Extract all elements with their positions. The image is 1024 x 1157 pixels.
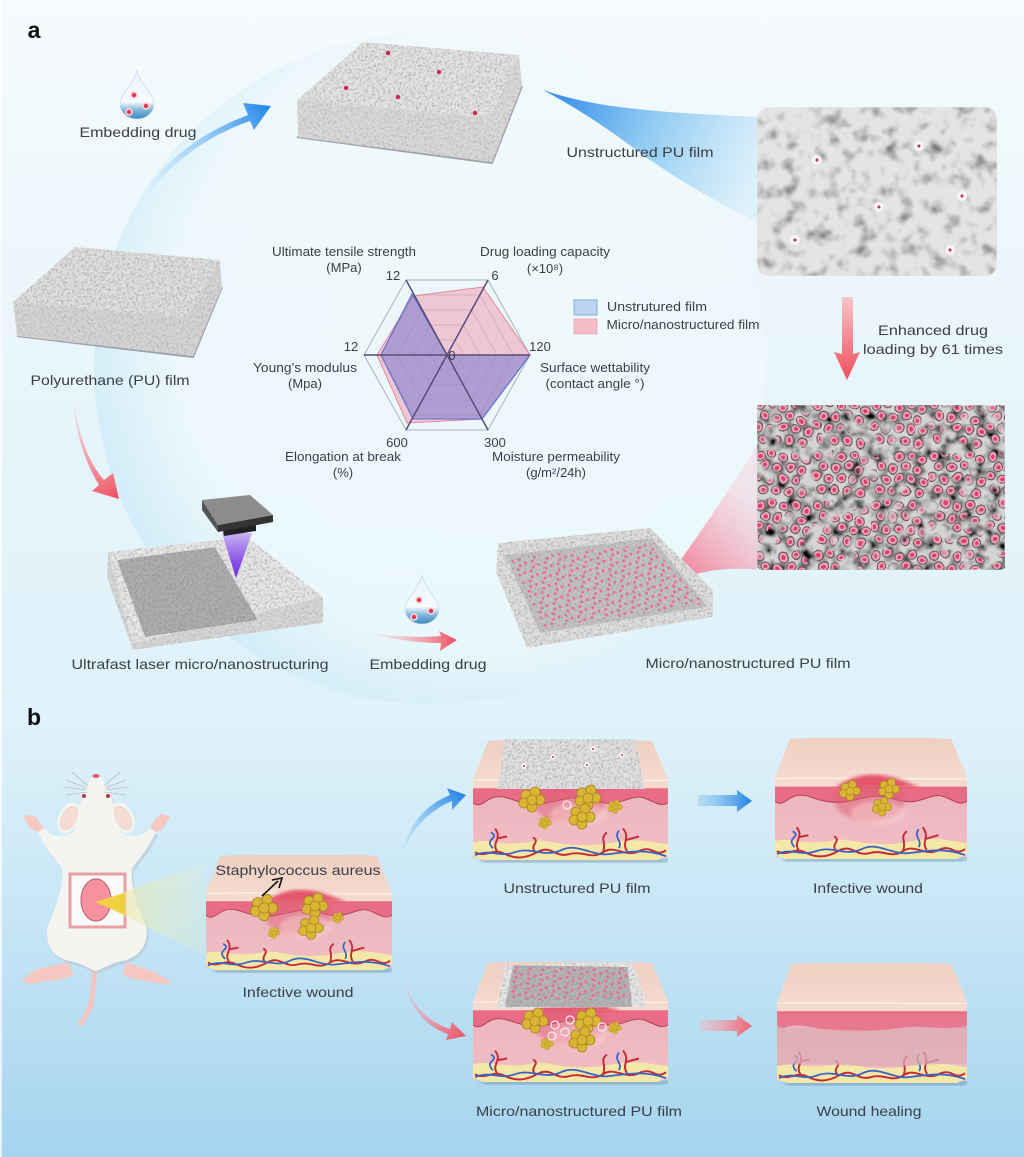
- beam core: [95, 893, 125, 915]
- arrow: embedding drug blue: [148, 103, 271, 190]
- laser head and beam: [202, 495, 273, 578]
- panel: a: [13, 17, 1005, 672]
- text: polyurethane film: Polyurethane (PU) film: [30, 372, 190, 388]
- text: infective wound result: Infective wound: [813, 880, 923, 896]
- radar chart: Surface wettability: [540, 360, 651, 375]
- panel: b: [21, 704, 978, 1119]
- wound block with unstructured film: [473, 739, 679, 863]
- arrow: to laser: [74, 395, 119, 499]
- text: wound healing: Wound healing: [816, 1103, 922, 1119]
- arrow: enhanced loading: [834, 297, 860, 380]
- micro/nanostructured film block: [496, 528, 713, 648]
- radar chart: 12: [344, 339, 358, 354]
- healed skin block: [777, 963, 978, 1086]
- arrow: pink straight: [700, 1015, 752, 1037]
- radar chart: 120: [529, 339, 551, 354]
- text: micro film: Micro/nanostructured PU film: [646, 655, 850, 671]
- arrow: blue straight: [698, 790, 752, 812]
- wedge: to SEM unstructured: [543, 90, 760, 223]
- radar chart: 0: [448, 348, 456, 363]
- text: staphylococcus aureus: Staphylococcus aureus: [216, 862, 380, 878]
- radar chart: (×10⁸): [527, 261, 563, 276]
- radar chart: Moisture permeability: [492, 449, 621, 464]
- unstructured film block: [297, 42, 522, 163]
- legend: [574, 299, 760, 334]
- radar chart: (MPa): [326, 260, 362, 275]
- beam: zoom to wound: [97, 862, 206, 956]
- radar chart: (Mpa): [288, 376, 322, 391]
- process cycle ring: [94, 32, 766, 704]
- radar chart: 6: [491, 268, 499, 283]
- legend: Unstrutured film: [607, 299, 707, 314]
- radar chart: Elongation at break: [285, 449, 402, 464]
- text: enhanced drug loading: loading by 61 times: [863, 341, 1003, 357]
- icon: drug drop bottom: [405, 575, 439, 624]
- arrow: pink to micro: [402, 978, 466, 1040]
- SEM image unstructured: [757, 107, 997, 276]
- arrow: blue to unstructured: [402, 788, 466, 855]
- text: unstructured PU film: Unstructured PU film: [566, 144, 714, 160]
- label b: b: [27, 704, 41, 730]
- polyurethane film block: [13, 247, 222, 357]
- laser-structured film block: [107, 537, 323, 650]
- radar chart: Young's modulus: [253, 360, 358, 375]
- radar chart: Drug loading capacity: [480, 244, 611, 259]
- arrow: embedding drug red: [372, 631, 457, 651]
- radar chart: 600: [386, 435, 408, 450]
- label a: a: [28, 17, 41, 43]
- radar chart: (%): [333, 465, 353, 480]
- infective wound result block: [775, 738, 978, 862]
- radar chart: (contact angle °): [546, 376, 644, 391]
- SEM image micro/nanostructured: [757, 405, 1005, 570]
- text: embedding drug bottom: Embedding drug: [370, 656, 486, 672]
- infective wound block: [206, 855, 402, 973]
- wound block with micro film: [473, 962, 679, 1085]
- radar chart: Ultimate tensile strength: [272, 244, 416, 259]
- legend: Micro/nanostructured film: [606, 317, 760, 332]
- radar chart: 300: [484, 435, 506, 450]
- text: embedding drug top: Embedding drug: [80, 124, 196, 140]
- radar chart: [253, 244, 651, 480]
- text: laser structuring: Ultrafast laser micro/nanostructuring: [72, 656, 328, 672]
- radar chart: (g/m²/24h): [526, 465, 586, 480]
- radar chart: 12: [386, 268, 400, 283]
- text: enhanced drug loading: [863, 322, 1003, 357]
- text: infective wound: Infective wound: [242, 984, 354, 1000]
- text: unstructured film b: Unstructured PU film: [504, 880, 650, 896]
- icon: drug drop top: [120, 70, 154, 119]
- text: micro film b: Micro/nanostructured PU film: [476, 1103, 682, 1119]
- mouse illustration: [21, 772, 173, 1024]
- wedge: to SEM micro: [663, 445, 757, 585]
- arrow: bacteria pointer: [262, 878, 282, 896]
- text: enhanced drug loading: Enhanced drug: [878, 322, 988, 338]
